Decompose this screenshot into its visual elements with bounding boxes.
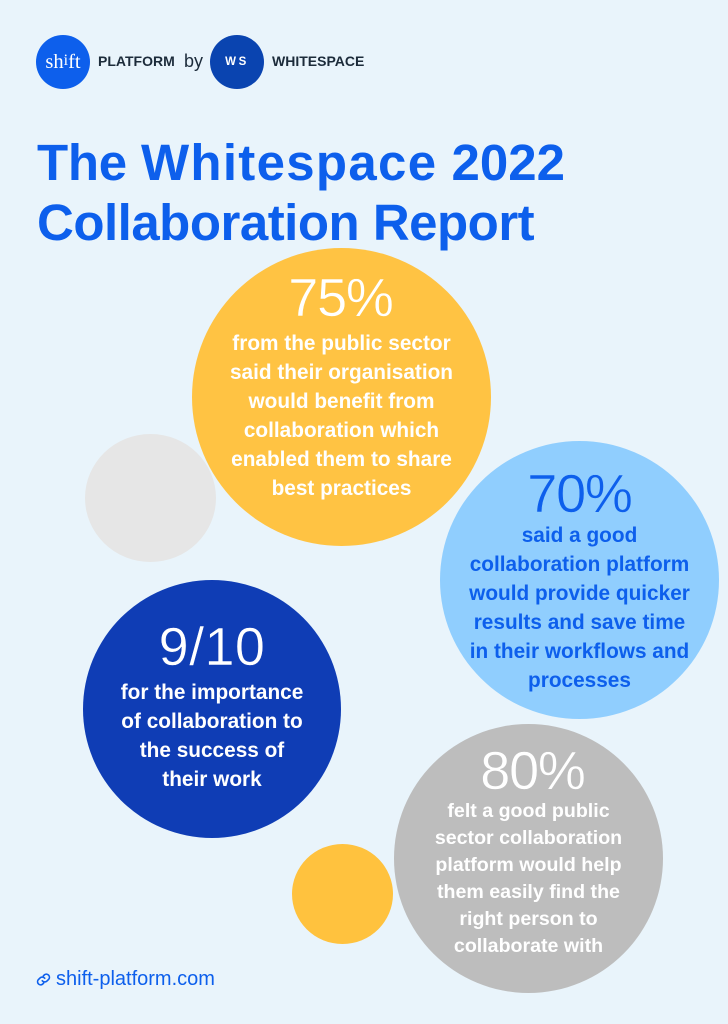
stat description: would benefit from bbox=[248, 390, 434, 413]
stat description bbox=[435, 800, 622, 957]
icon: shift logo: shift bbox=[45, 51, 81, 73]
stat number 80%: 80% bbox=[480, 741, 585, 801]
stat description bbox=[230, 332, 453, 500]
platform label: PLATFORM bbox=[98, 53, 175, 69]
icon: whitespace logo bbox=[210, 35, 264, 89]
panel: 80% stat bbox=[394, 724, 663, 993]
stat description: said their organisation bbox=[230, 361, 453, 384]
stat description bbox=[121, 681, 303, 791]
decorative grey circle bbox=[85, 434, 216, 562]
title: Collaboration Report bbox=[37, 194, 534, 251]
by label: by bbox=[184, 51, 203, 71]
title: The Whitespace 2022 bbox=[37, 134, 565, 191]
panel: 75% stat bbox=[192, 248, 491, 546]
panel: 70% stat bbox=[440, 441, 719, 719]
stat description: enabled them to share bbox=[231, 448, 452, 471]
stat description: platform would help bbox=[435, 854, 622, 876]
stat description: in their workflows and bbox=[470, 640, 689, 663]
icon: shift logo bbox=[36, 35, 90, 89]
footer url: shift-platform.com bbox=[56, 968, 215, 990]
stat number 9/10: 9/10 bbox=[159, 617, 265, 677]
stat description: processes bbox=[528, 669, 631, 692]
stat description: sector collaboration bbox=[435, 827, 622, 849]
stat description: said a good bbox=[522, 524, 637, 547]
stat number 75%: 75% bbox=[288, 268, 393, 328]
stat description: results and save time bbox=[474, 611, 685, 634]
icon: whitespace logo: WS bbox=[225, 56, 249, 68]
stat description bbox=[469, 524, 690, 692]
stat description: felt a good public bbox=[447, 800, 610, 822]
footer link bbox=[36, 968, 215, 990]
stat description: of collaboration to bbox=[121, 710, 303, 733]
stat number 70%: 70% bbox=[527, 464, 632, 524]
decorative yellow circle bbox=[292, 844, 393, 944]
stat description: them easily find the bbox=[437, 881, 620, 903]
title bbox=[37, 134, 565, 251]
stat description: collaboration which bbox=[244, 419, 439, 442]
stat description: right person to bbox=[459, 908, 598, 930]
stat description: their work bbox=[162, 768, 262, 791]
stat description: would provide quicker bbox=[469, 582, 690, 605]
stat description: for the importance bbox=[121, 681, 303, 704]
whitespace label: WHITESPACE bbox=[272, 53, 364, 69]
stat description: from the public sector bbox=[232, 332, 451, 355]
panel: 9/10 stat bbox=[83, 580, 341, 838]
icon: link bbox=[36, 973, 50, 986]
logo header bbox=[36, 35, 364, 89]
stat description: collaboration platform bbox=[470, 553, 689, 576]
stat description: best practices bbox=[272, 477, 411, 500]
stat description: collaborate with bbox=[454, 935, 603, 957]
stat description: the success of bbox=[140, 739, 284, 762]
